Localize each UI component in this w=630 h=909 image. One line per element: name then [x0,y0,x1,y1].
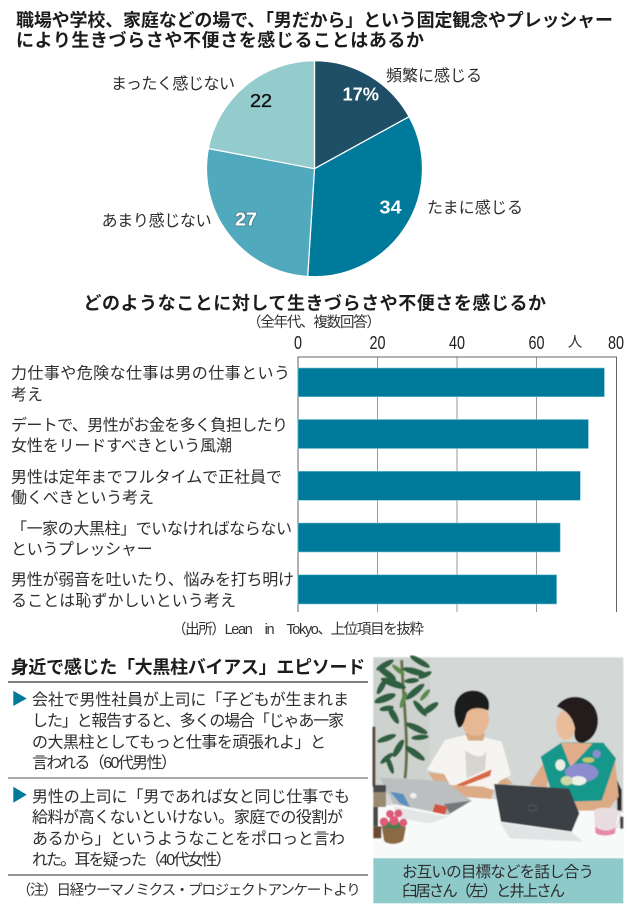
wall [373,657,623,858]
title: により生きづらさや不便さを感じることはあるか [16,30,424,50]
episode 1 [32,691,349,772]
slice: たまに感じる 34% [308,117,422,277]
label たまに感じる: たまに感じる [427,199,523,217]
bar label 1: 力仕事や危険な仕事は男の仕事という [11,364,290,382]
bar label 5 [11,571,294,610]
flower pot [380,809,407,844]
bar label 3: 男性は定年までフルタイムで正社員で [11,468,282,486]
title: 職場や学校、家庭などの場で、「男だから」という固定観念やプレッシャー [16,10,613,30]
source note: （出所）Lean in Tokyo、上位項目を抜粋 [172,621,424,638]
photo [373,653,623,903]
bar label 1: 考え [11,386,43,404]
slice: あまり感じない 27% [206,148,314,276]
bar chart [11,333,624,612]
bar label 1 [11,364,290,404]
episode 2: 男性の上司に「男であれば女と同じ仕事でも [32,788,350,806]
footnote: （注）日経ウーマノミクス・プロジェクトアンケートより [17,882,361,899]
bar label 2: デートで、男性がお金を多く負担したり [11,416,288,434]
bar chart heading [84,292,546,331]
photo caption: お互いの目標などを話し合う [402,863,594,881]
bars [298,368,604,604]
silver laptop [380,778,472,815]
chair [617,779,622,811]
value 22: 22 [250,90,272,111]
slice: まったく感じない 22% [208,61,314,169]
bar label 4 [11,520,292,558]
icon: arrow 1 [13,691,27,706]
dividers [8,682,368,875]
episode 2: あるから」というようなことをポロっと言わ [32,830,345,848]
episode 2 [32,788,350,869]
bar label 5: ることは恥ずかしいという考え [11,592,236,610]
episode 1: 会社で男性社員が上司に「子どもが生まれま [32,691,349,709]
icon: arrow 2 [13,787,27,803]
episode 1: 言われる（60代男性） [32,754,177,772]
slice: 頻繁に感じる 17% [314,61,409,169]
bar label 3: 働くべきという考え [11,489,154,507]
panel: episodes [8,656,368,899]
pie chart [102,61,523,277]
value 27: 27 [235,208,257,230]
photo caption: 臼居さん（左）と井上さん [402,882,565,900]
photo scene [373,653,623,858]
black laptop [494,784,579,832]
axis labels: 40 [449,333,465,353]
value 17%: 17% [342,84,379,104]
episode 2: れた。耳を疑った（40代女性） [32,851,232,869]
axis labels: 0 [294,333,302,353]
mug [594,808,621,836]
bar label 5: 男性が弱音を吐いたり、悩みを打ち明け [11,571,294,589]
caption band [373,858,623,903]
axis labels [294,333,624,353]
label あまり感じない: あまり感じない [102,212,212,230]
bar label 2 [11,416,288,455]
woman [529,697,619,811]
left table items [373,785,623,838]
label 頻繁に感じる: 頻繁に感じる [386,67,482,85]
bar label 4: というプレッシャー [11,540,153,558]
grid [298,357,616,612]
episode 1: した」と報告すると、多くの場合「じゃあ一家 [32,712,344,730]
title [16,10,613,50]
plant [373,653,440,787]
bar label 2: 女性をリードすべきという風潮 [11,437,232,455]
axis labels: 60 [528,333,544,353]
table [373,797,623,858]
axis labels: 80 [608,333,624,353]
axis labels: 20 [370,333,386,353]
label まったく感じない: まったく感じない [111,75,235,93]
man [427,691,513,799]
panel heading: 身近で感じた「大黒柱バイアス」エピソード [11,656,365,678]
bar chart heading: （全年代、複数回答） [247,314,381,331]
shadows on table [393,807,448,823]
axis labels: 人 [568,335,583,351]
bar chart heading: どのようなことに対して生きづらさや不便さを感じるか [84,292,546,314]
photo caption [402,863,594,900]
bar label 4: 「一家の大黒柱」でいなければならない [11,520,292,538]
episode 1: の大黒柱としてもっと仕事を頑張れよ」と [32,734,326,752]
episode 2: 給料が高くないといけない。家庭での役割が [32,808,343,826]
bar label 3 [11,468,282,507]
value 34: 34 [380,196,402,218]
